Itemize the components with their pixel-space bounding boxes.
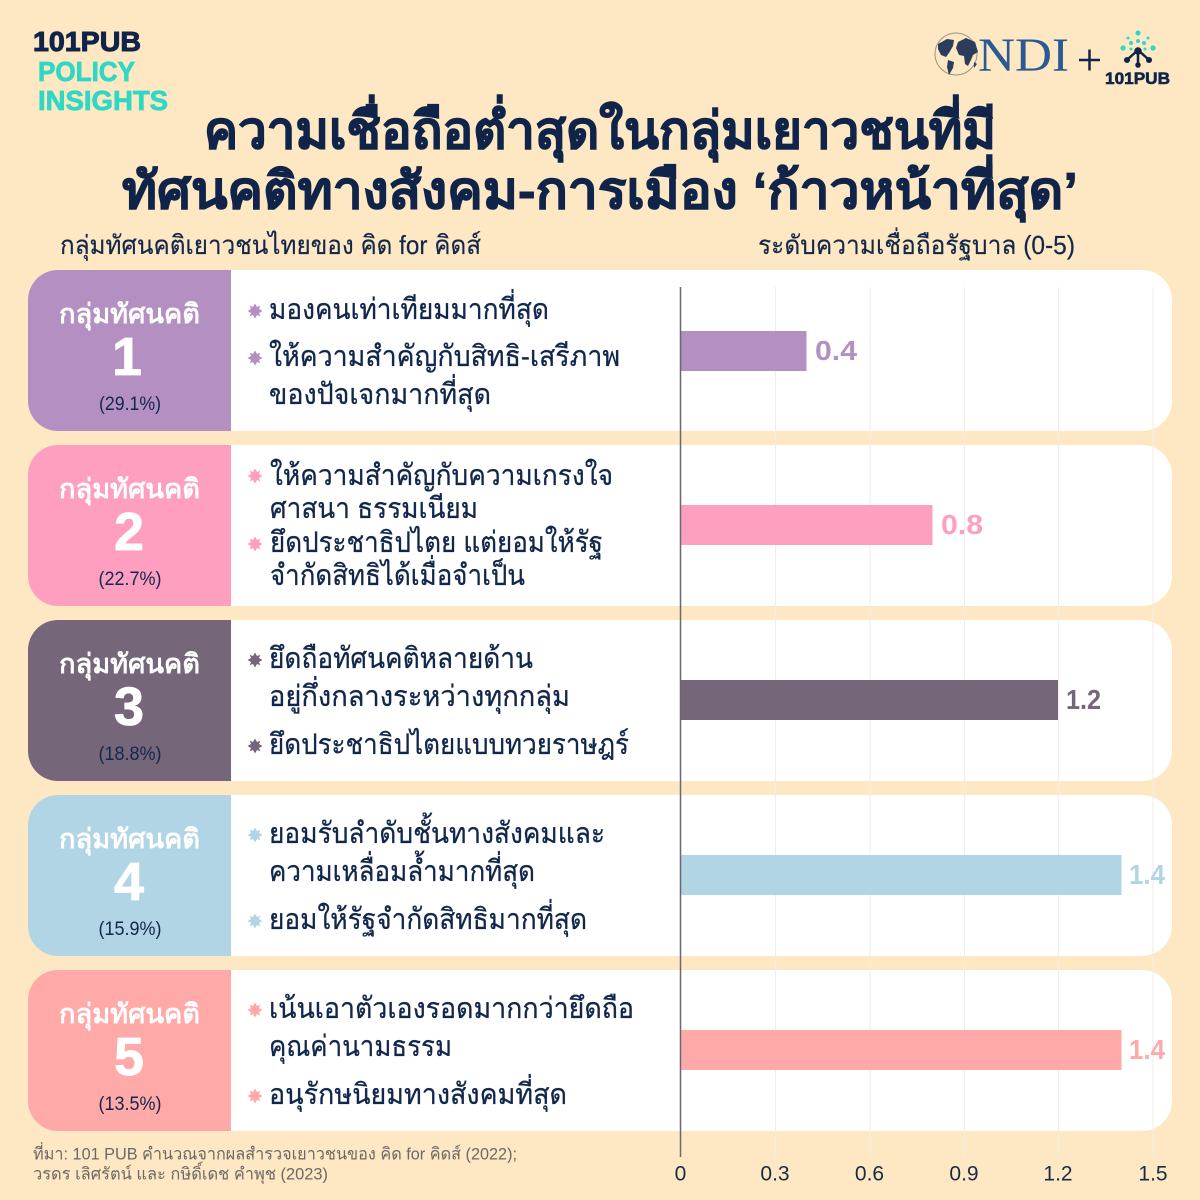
- bar: group 1: [681, 331, 857, 371]
- axis labels: 1.2: [1043, 1162, 1073, 1186]
- panel: group 2: 2: [114, 502, 144, 562]
- panel: group 4: ยอมรับลำดับชั้นทางสังคมและ: [269, 812, 605, 850]
- panel: group 2: ให้ความสำคัญกับความเกรงใจ: [270, 458, 613, 492]
- bar: group 3: 1.2: [1066, 684, 1101, 715]
- logo: 101PUB Policy Insights: [33, 26, 168, 116]
- bar: group 1: 0.4: [815, 335, 857, 366]
- panel: group 1: มองคนเท่าเทียมมากที่สุด: [269, 289, 549, 327]
- panel: group 1: ของปัจเจกมากที่สุด: [269, 374, 491, 412]
- panel: group 5: กลุ่มทัศนคติ: [59, 999, 200, 1031]
- bar chart: [675, 287, 1168, 1186]
- panel: group 1: (29.1%): [99, 394, 161, 415]
- axis labels: 0.3: [760, 1162, 790, 1186]
- column heading: trust level: ระดับความเชื่อถือรัฐบาล (0-5): [758, 227, 1075, 261]
- bar: group 4: 1.4: [1129, 859, 1165, 890]
- panel: group 2: ยึดประชาธิปไตย แต่ยอมให้รัฐ: [270, 525, 603, 560]
- panel: group 3: กลุ่มทัศนคติ: [59, 649, 200, 681]
- panel: group 2: จำกัดสิทธิได้เมื่อจำเป็น: [270, 555, 525, 592]
- logo: NDI and 101PUB: NDI: [978, 29, 1069, 82]
- panel: group 3: ยึดประชาธิปไตยแบบทวยราษฎร์: [269, 727, 629, 761]
- bar: group 4: [681, 855, 1165, 895]
- panel: group 3: 3: [114, 677, 144, 737]
- panel: group 3: อยู่กึ่งกลางระหว่างทุกกลุ่ม: [269, 676, 570, 714]
- panel: group 2: ศาสนา ธรรมเนียม: [270, 493, 478, 525]
- bar: group 3: [681, 680, 1101, 720]
- panel: group 5: คุณค่านามธรรม: [269, 1031, 452, 1064]
- title: ทัศนคติทางสังคม-การเมือง ‘ก้าวหน้าที่สุด’: [122, 155, 1078, 223]
- panel: group 4: กลุ่มทัศนคติ: [59, 824, 200, 856]
- panel: group 4: 4: [114, 852, 144, 912]
- panel: group 4: ยอมให้รัฐจำกัดสิทธิมากที่สุด: [269, 899, 587, 937]
- axis labels: 0.9: [949, 1162, 979, 1186]
- panel: group 5: เน้นเอาตัวเองรอดมากกว่ายึดถือ: [269, 993, 634, 1025]
- panel: group 4: (15.9%): [98, 919, 162, 940]
- panel: group 1: [28, 270, 1172, 431]
- panel: group 5: 5: [114, 1027, 144, 1087]
- source note: ที่มา: 101 PUB คำนวณจากผลสำรวจเยาวชนของ คิด for คิดส์ (2022);: [33, 1142, 517, 1164]
- panel: group 2: กลุ่มทัศนคติ: [59, 474, 200, 506]
- title: ความเชื่อถือต่ำสุดในกลุ่มเยาวชนที่มี: [204, 95, 996, 163]
- logo: 101PUB Policy Insights: POLICY: [38, 56, 135, 87]
- axis labels: 0.6: [855, 1162, 884, 1186]
- panel: group 5: (13.5%): [98, 1094, 162, 1115]
- panel: group 3: [28, 620, 1172, 781]
- panel: group 1: ให้ความสำคัญกับสิทธิ-เสรีภาพ: [269, 339, 620, 373]
- panel: group 1: 1: [112, 327, 142, 387]
- source note: [33, 1142, 517, 1184]
- column heading: groups: กลุ่มทัศนคติเยาวชนไทยของ คิด for คิดส์: [60, 230, 481, 261]
- bar: group 5: [681, 1030, 1165, 1070]
- logo: NDI and 101PUB: [935, 29, 1170, 88]
- panel: group 2: [28, 445, 1172, 606]
- panel: group 3: ยึดถือทัศนคติหลายด้าน: [269, 643, 533, 675]
- panel: group 5: [28, 970, 1172, 1131]
- panel: group 5: อนุรักษนิยมทางสังคมที่สุด: [269, 1074, 567, 1112]
- logo: 101PUB Policy Insights: 101PUB: [33, 26, 141, 57]
- bar: group 5: 1.4: [1129, 1034, 1165, 1065]
- logo: 101PUB Policy Insights: INSIGHTS: [38, 85, 168, 116]
- panel: group 4: [28, 795, 1172, 956]
- title: [122, 95, 1078, 223]
- panel: group 3: (18.8%): [98, 744, 162, 765]
- axis labels: 0: [675, 1162, 686, 1186]
- axis labels: 1.5: [1138, 1162, 1168, 1186]
- source note: วรดร เลิศรัตน์ และ กษิดิ์เดช คำพุช (2023): [33, 1162, 328, 1184]
- panel: group 2: (22.7%): [98, 569, 162, 590]
- axis labels: [675, 1162, 1168, 1186]
- bar: group 2: 0.8: [941, 509, 983, 540]
- logo: NDI and 101PUB: 101PUB: [1105, 69, 1170, 88]
- bar: group 2: [681, 505, 983, 545]
- panel: group 1: กลุ่มทัศนคติ: [59, 299, 200, 331]
- panel: group 4: ความเหลื่อมล้ำมากที่สุด: [269, 850, 535, 889]
